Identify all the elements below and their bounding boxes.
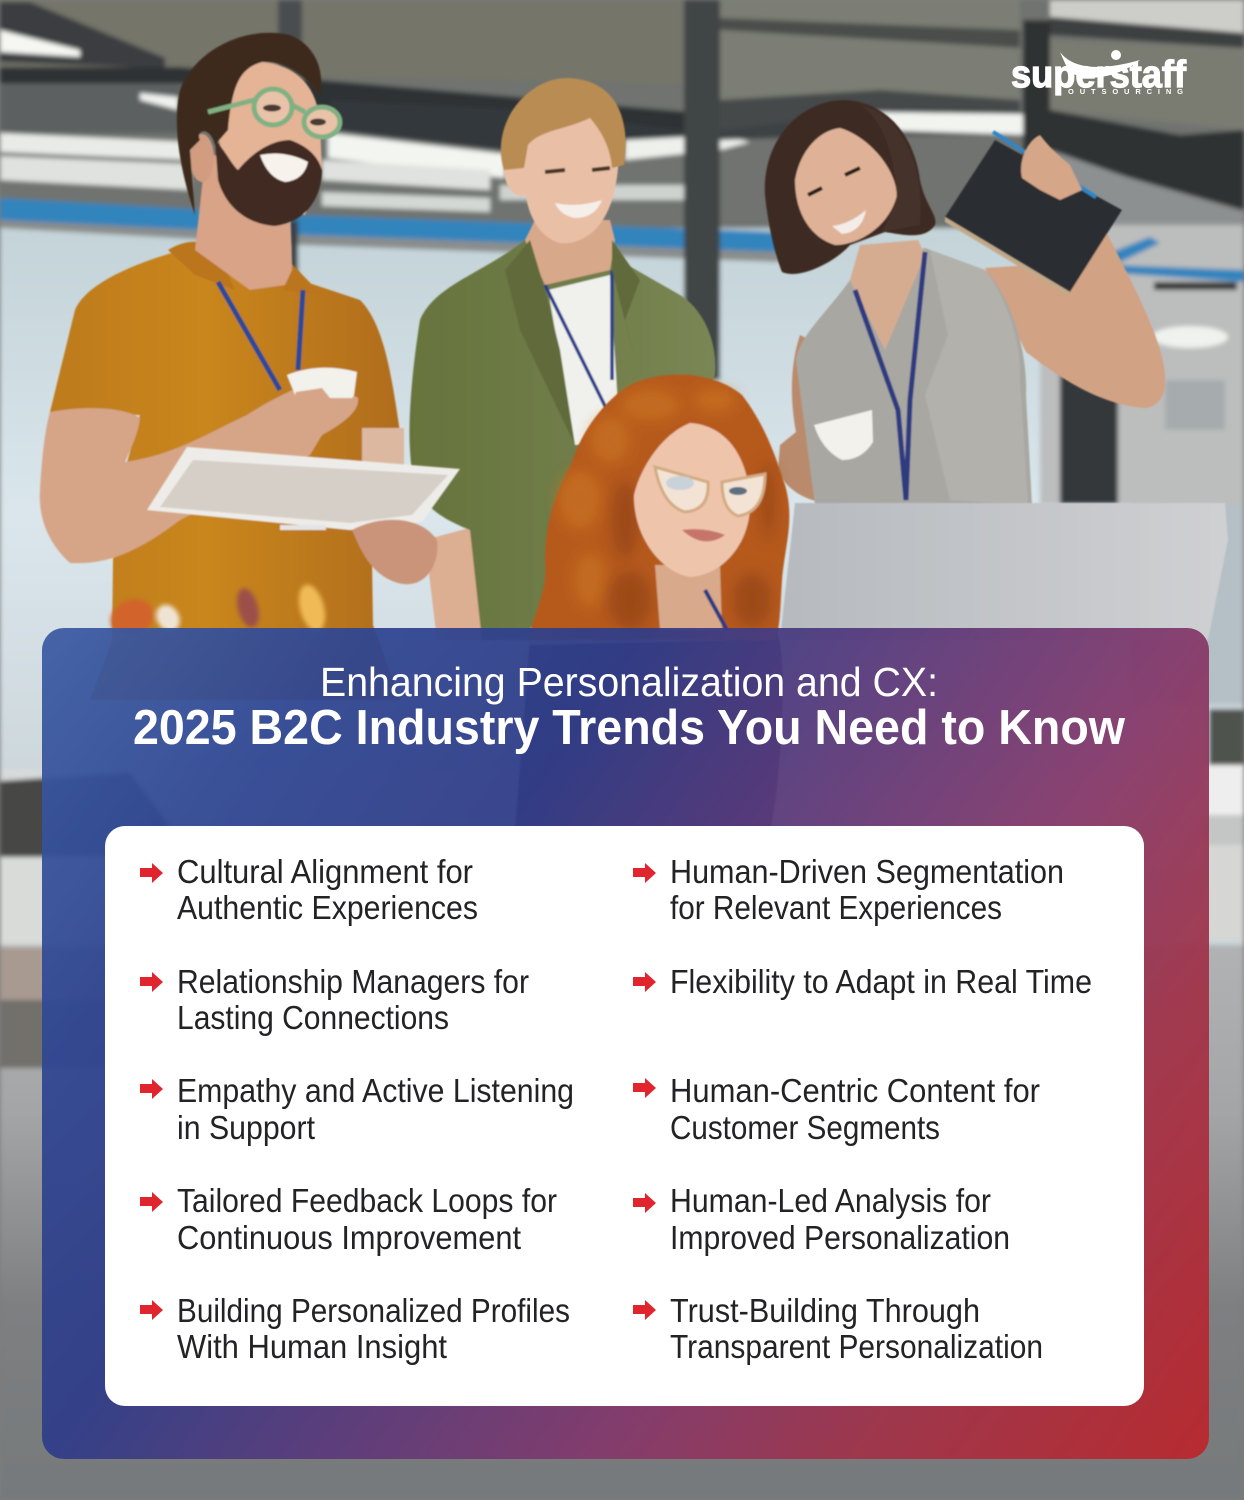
list item: Human-Driven Segmentation (633, 854, 1064, 927)
blurred pencils in the foreground (104, 582, 330, 644)
heading: Enhancing Personalization and CX: (320, 659, 938, 705)
list item: Relationship Managers: Relationship Managers for (177, 964, 529, 1001)
list item: Relationship Managers: Lasting Connections (177, 1000, 449, 1037)
head (504, 104, 618, 243)
list item: Tailored Feedback Loops: Tailored Feedback Loops for (177, 1183, 557, 1220)
hair (765, 100, 935, 274)
list item: Empathy and Active Listening: Empathy and Active Listening (177, 1073, 574, 1110)
hair (177, 33, 321, 215)
notebook (945, 140, 1122, 292)
list item: Cultural Alignment (140, 854, 478, 927)
list item: Flexibility to Adapt: Flexibility to Adapt in Real Time (670, 964, 1092, 1001)
glasses (208, 89, 340, 137)
panel: white list card (105, 826, 1144, 1406)
list item: Empathy and Active Listening (140, 1073, 574, 1147)
heading (133, 659, 1126, 755)
list item: Trust-Building: Transparent Personalization (670, 1329, 1043, 1366)
list item: Building Personalized Profiles: Building Personalized Profiles (177, 1293, 570, 1330)
vest (796, 248, 1032, 505)
laptop (780, 503, 1228, 640)
list item: Human-Driven Segmentation: for Relevant Experiences (670, 890, 1002, 927)
polo shirt (50, 252, 400, 700)
hair (528, 375, 789, 640)
beard (215, 140, 322, 226)
neck (655, 565, 722, 630)
logo: Superstaff Outsourcing: OUTSOURCING (1068, 87, 1183, 96)
papers (147, 447, 460, 530)
arm (40, 378, 358, 563)
heading: 2025 B2C Industry Trends You Need to Know (133, 701, 1126, 755)
list item: Human-Led Analysis: Human-Led Analysis for (670, 1183, 991, 1220)
ear (190, 134, 214, 182)
list item: Trust-Building (633, 1293, 1043, 1366)
pencil and hand (993, 132, 1096, 197)
list item: Human-Led Analysis: Improved Personalization (670, 1220, 1010, 1257)
list item: Tailored Feedback Loops: Continuous Improvement (177, 1220, 522, 1257)
face (634, 423, 750, 577)
list item: Human-Centric Content (633, 1073, 1040, 1147)
logo: Superstaff Outsourcing: superstaff (1011, 54, 1186, 96)
person: man in the middle in a green shirt (409, 78, 715, 640)
hand holding papers (352, 520, 437, 584)
neck (195, 150, 292, 290)
person: red-haired woman seated at the laptop (515, 375, 789, 830)
person: woman on the right with notebook and cup (765, 100, 1165, 505)
far arm and hand (778, 335, 838, 503)
list item: Human-Centric Content: Human-Centric Content for (670, 1073, 1040, 1110)
list item: Building Personalized Profiles: With Human Insight (177, 1329, 448, 1366)
list item: Cultural Alignment: Authentic Experiences (177, 890, 478, 927)
list item: Empathy and Active Listening: in Support (177, 1110, 316, 1147)
face (795, 128, 897, 245)
cup (287, 368, 357, 412)
list item: Human-Led Analysis (633, 1183, 1010, 1257)
panel: gradient card (42, 628, 1209, 1459)
list item: Trust-Building: Trust-Building Through (670, 1293, 980, 1330)
glasses (655, 467, 765, 516)
neck and chest (850, 240, 925, 350)
list item: Tailored Feedback Loops (140, 1183, 557, 1257)
list item: Cultural Alignment: Cultural Alignment for (177, 854, 473, 891)
list item: Human-Centric Content: Customer Segments (670, 1110, 940, 1147)
cup (814, 410, 873, 460)
list item: Building Personalized Profiles (140, 1293, 570, 1366)
list item: Relationship Managers (140, 964, 529, 1037)
list item: Human-Driven Segmentation: Human-Driven Segmentation (670, 854, 1064, 891)
person: man on the left with orange polo, glasses, cup and papers (40, 33, 460, 700)
face (212, 62, 322, 215)
raised arm (985, 190, 1165, 408)
